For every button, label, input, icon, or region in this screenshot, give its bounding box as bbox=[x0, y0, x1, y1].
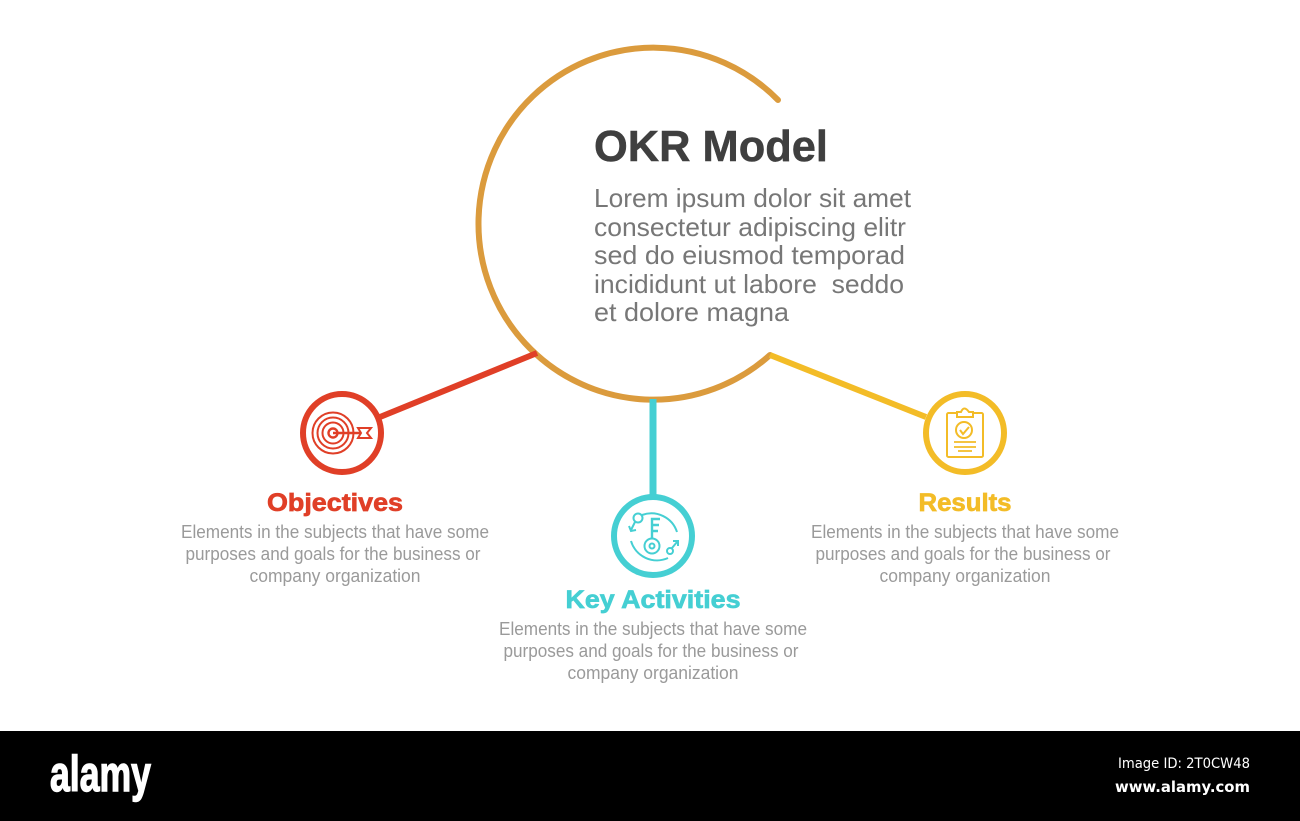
intro text block: incididunt ut labore seddo bbox=[594, 269, 904, 299]
intro text block: Lorem ipsum dolor sit amet bbox=[594, 183, 912, 213]
label block: results: Elements in the subjects that have some bbox=[811, 522, 1119, 542]
label block: objectives bbox=[181, 489, 489, 586]
intro text block: sed do eiusmod temporad bbox=[594, 240, 905, 270]
connector: key activities bbox=[650, 399, 656, 496]
label block: key activities: Key Activities bbox=[566, 586, 740, 614]
website: www.alamy.com bbox=[1115, 778, 1250, 796]
label block: results: company organization bbox=[880, 566, 1050, 586]
icon: results clipboard bbox=[926, 394, 1004, 472]
icon: objectives target bbox=[303, 394, 381, 472]
label block: results: Results bbox=[918, 489, 1012, 517]
label block: key activities: Elements in the subjects that have some bbox=[499, 619, 807, 639]
intro text block bbox=[594, 183, 912, 327]
label block: objectives: company organization bbox=[250, 566, 420, 586]
label block: key activities bbox=[499, 586, 807, 683]
label block: results bbox=[811, 489, 1119, 586]
intro text block: et dolore magna bbox=[594, 297, 790, 327]
footer bar bbox=[0, 731, 1300, 821]
label block: results: purposes and goals for the business or bbox=[816, 544, 1110, 564]
image id: Image ID: 2T0CW48 bbox=[1118, 756, 1250, 772]
label block: key activities: company organization bbox=[568, 663, 738, 683]
label block: key activities: purposes and goals for the business or bbox=[504, 641, 798, 661]
connector: objectives bbox=[380, 353, 537, 417]
main open circle bbox=[478, 48, 778, 400]
label block: objectives: Elements in the subjects that have some bbox=[181, 522, 489, 542]
icon: key activities key bbox=[614, 497, 692, 575]
logo: alamy: alamy bbox=[50, 746, 151, 802]
label block: objectives: purposes and goals for the business or bbox=[186, 544, 480, 564]
label block: objectives: Objectives bbox=[267, 489, 403, 517]
title: OKR Model bbox=[594, 122, 828, 171]
intro text block: consectetur adipiscing elitr bbox=[594, 212, 906, 242]
connector: results bbox=[770, 355, 926, 417]
